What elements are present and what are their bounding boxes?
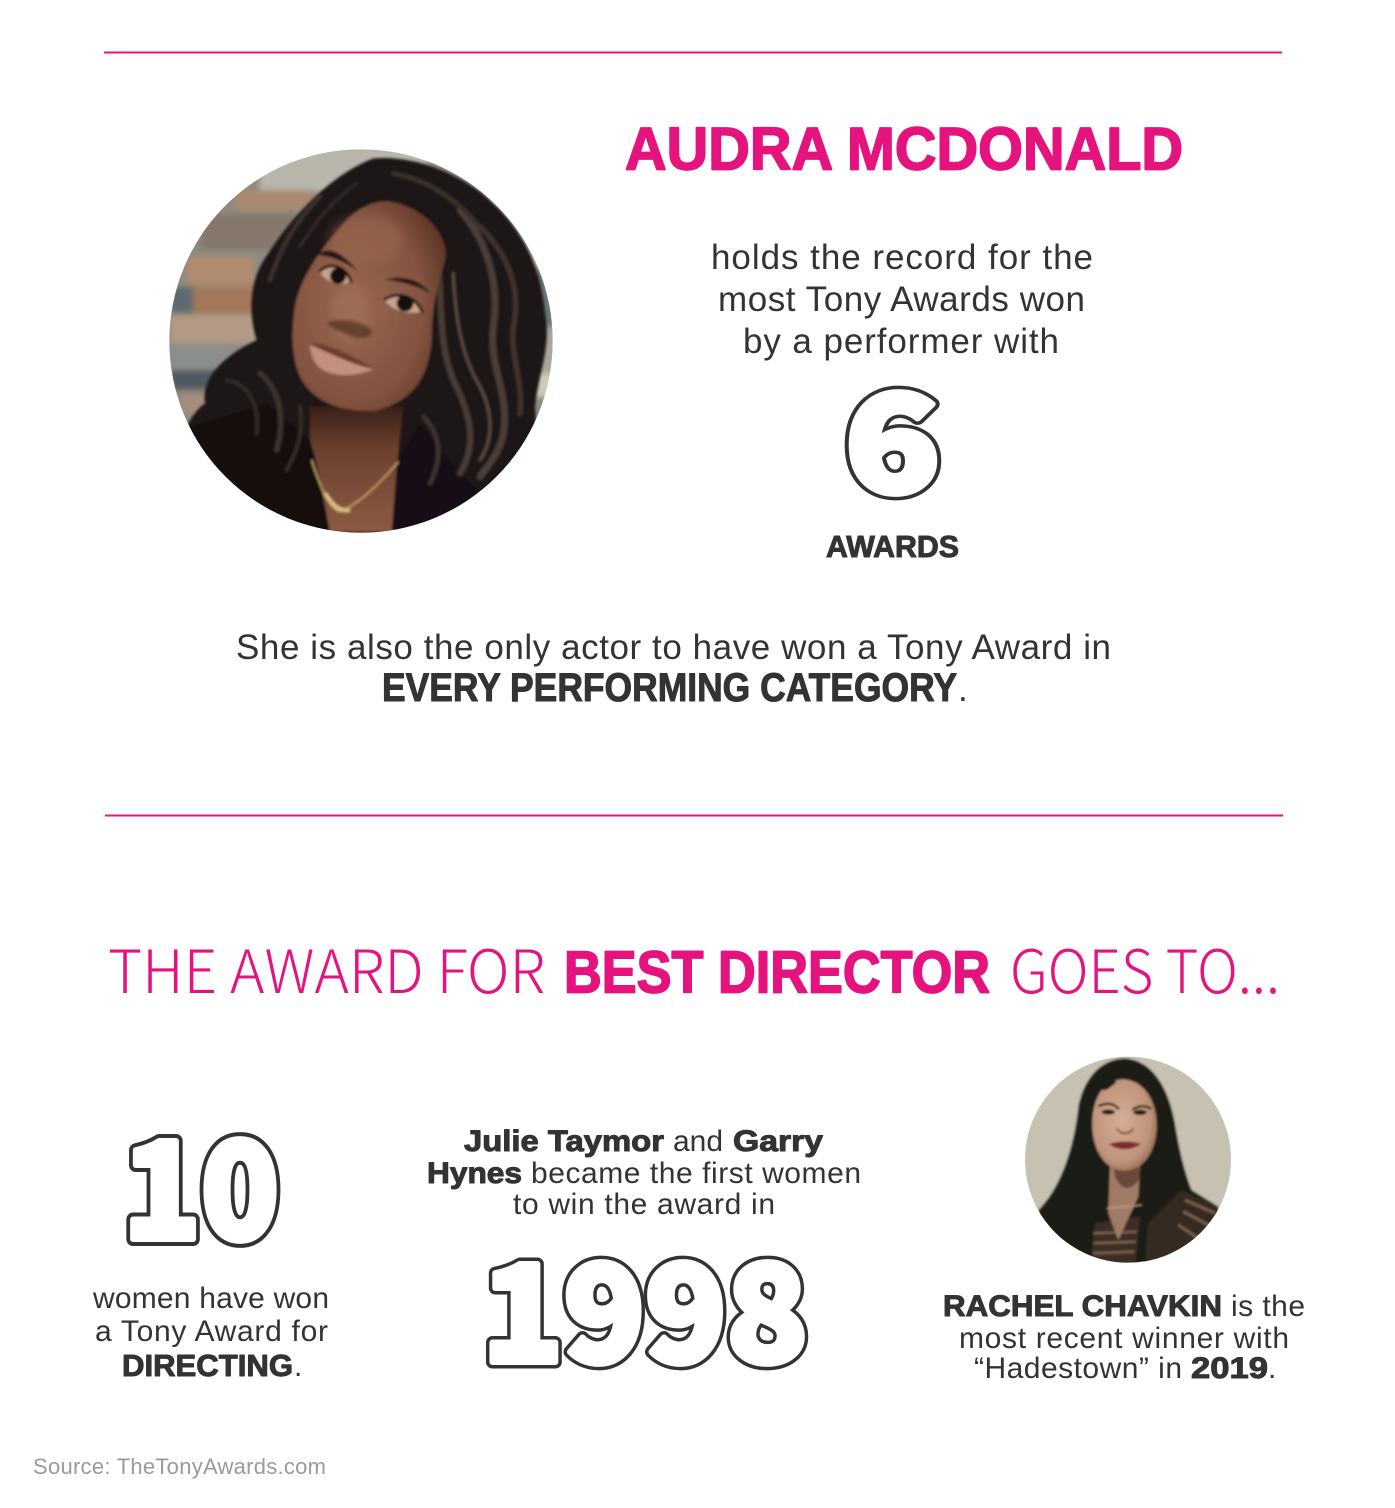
number: 6 awards outlined: 6: [845, 335, 940, 531]
text: Julie Taymor and Garry Hynes: to win the award in: [513, 1188, 775, 1221]
text: every performing category: .: [958, 670, 968, 709]
text: women have won: DIRECTING: [122, 1348, 293, 1383]
text: women have won: a Tony Award for: [95, 1315, 328, 1348]
text: record description: holds the record for the: [711, 238, 1093, 277]
text: Rachel Chavkin winner: “Hadestown” in: [974, 1352, 1182, 1385]
text: Julie Taymor and Garry Hynes: Hynes: [427, 1157, 522, 1190]
text: Rachel Chavkin winner: 2019: [1191, 1352, 1268, 1385]
panel: Audra McDonald record: [104, 52, 1283, 816]
number: 10 outlined: 10: [123, 1082, 279, 1278]
column: ten women directors: [92, 1082, 329, 1383]
text: Rachel Chavkin winner: is the: [1231, 1290, 1305, 1323]
text: Rachel Chavkin winner: .: [1268, 1352, 1276, 1385]
text: Julie Taymor and Garry Hynes: Julie Taymor: [464, 1125, 664, 1158]
number: 10 outlined: 10: [123, 1082, 279, 1278]
label: awards: AWARDS: [826, 529, 959, 564]
column: Rachel Chavkin: [943, 1050, 1305, 1385]
heading: Audra McDonald: AUDRA MCDONALD: [625, 116, 1183, 182]
source note: Source: TheTonyAwards.com: [33, 1454, 326, 1479]
photo: Audra McDonald portrait: [169, 149, 553, 533]
heading: the award for best director goes to: BEST DIRECTOR: [564, 940, 990, 1006]
panel: Best Director: [92, 924, 1305, 1401]
number: 1998 outlined: 1998: [482, 1205, 808, 1401]
text: every performing category: EVERY PERFORMING CATEGORY: [382, 666, 957, 710]
heading: the award for best director goes to: GOES TO...: [1010, 924, 1280, 1011]
text: record description: most Tony Awards won: [718, 280, 1085, 319]
text: women have won: [92, 1282, 329, 1383]
text: Julie Taymor and Garry Hynes: Garry: [733, 1125, 823, 1158]
text: women have won: .: [294, 1350, 302, 1383]
text: record description: [711, 238, 1093, 361]
column: first women winners: [427, 1125, 861, 1401]
text: every performing category: [236, 628, 1111, 710]
heading: the award for best director goes to: THE AWARD FOR: [108, 924, 545, 1011]
text: women have won: women have won: [92, 1282, 329, 1315]
photo: Rachel Chavkin portrait: [1025, 1056, 1231, 1263]
number: 6 awards outlined: 6: [845, 335, 940, 531]
text: every performing category: She is also the only actor to have won a Tony Award in: [236, 628, 1111, 667]
text: Julie Taymor and Garry Hynes: became the first women: [531, 1157, 861, 1190]
text: Rachel Chavkin winner: [943, 1290, 1305, 1385]
text: record description: by a performer with: [743, 322, 1059, 361]
text: Rachel Chavkin winner: RACHEL CHAVKIN: [943, 1290, 1222, 1323]
text: Rachel Chavkin winner: most recent winner with: [959, 1322, 1289, 1355]
number: 1998 outlined: 1998: [482, 1205, 808, 1401]
heading: the award for best director goes to: [108, 924, 1280, 1011]
text: Julie Taymor and Garry Hynes: [427, 1125, 861, 1221]
text: Julie Taymor and Garry Hynes: and: [673, 1125, 723, 1158]
